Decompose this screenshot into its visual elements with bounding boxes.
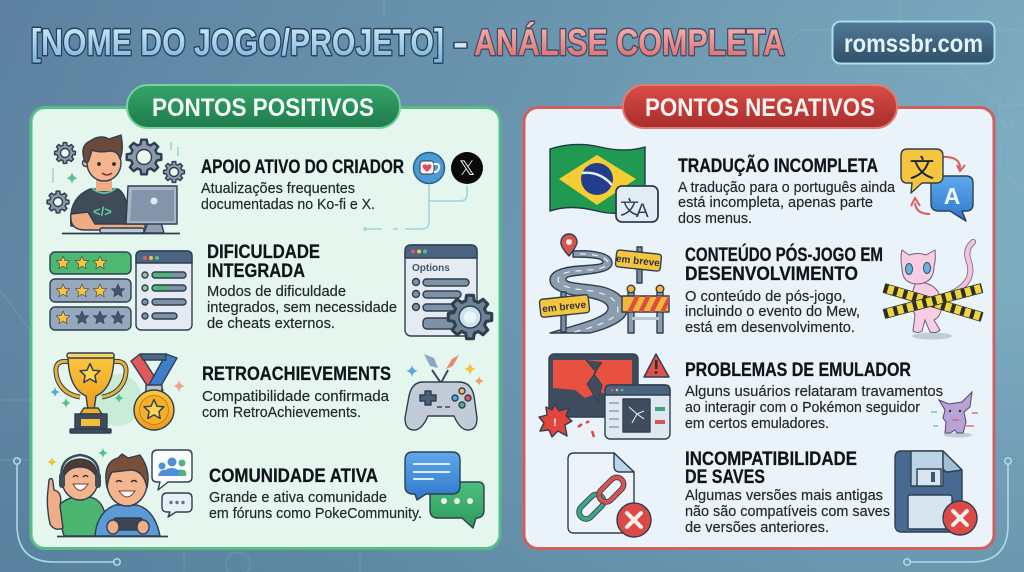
text: retroachievements: Compatibilidade confirmada — [202, 388, 390, 405]
icon: glitched purple creature — [931, 392, 978, 438]
text: retroachievements — [202, 364, 391, 421]
icon: road with em breve signs and barrier — [539, 234, 669, 333]
icon: road with em breve signs and barrier: em breve — [542, 300, 587, 315]
icon: game controller — [405, 354, 484, 430]
text: tradução incompleta: está incompleta, apenas parte — [678, 194, 873, 211]
text: problemas de emulador: em certos emuladores. — [685, 415, 829, 432]
icon: broken monitor and warning: ! — [553, 417, 557, 429]
text: comunidade ativa — [209, 466, 422, 522]
text: comunidade ativa: Grande e ativa comunidade — [209, 489, 387, 506]
icon: brazilian flag with translate badge: 文 — [620, 197, 639, 219]
text: apoio ativo do criador: Atualizações frequentes — [201, 180, 355, 197]
heading pill: pontos negativos — [623, 85, 897, 128]
icon: options window with gear — [405, 245, 492, 339]
text: conteúdo pós-jogo: O conteúdo de pós-jogo, — [685, 288, 846, 305]
text: dificuldade integrada: integrados, sem necessidade — [207, 299, 397, 316]
text: incompatibilidade de saves — [685, 449, 890, 536]
text: incompatibilidade de saves: não são compatíveis com saves — [685, 503, 890, 520]
text: dificuldade integrada: DIFICULDADE — [207, 242, 320, 263]
text: dificuldade integrada: Modos de dificuldade — [207, 283, 346, 300]
text: dificuldade integrada: INTEGRADA — [207, 261, 305, 282]
text: conteúdo pós-jogo: está em desenvolvimento. — [685, 319, 855, 336]
icon: road with em breve signs and barrier: em breve — [615, 254, 661, 269]
text: apoio ativo do criador: APOIO ATIVO DO CRIADOR — [201, 157, 404, 178]
icon: chat bubbles — [405, 452, 484, 528]
site badge: romssbr.com — [844, 30, 983, 58]
icons: ko-fi and x logos: 𝕏 — [459, 158, 475, 180]
icon: translation bubbles: A — [944, 183, 960, 209]
icon: difficulty star bars — [50, 251, 192, 330]
text: apoio ativo do criador — [201, 157, 404, 213]
icon: floppy disk with error — [895, 451, 977, 535]
text: comunidade ativa: em fóruns como PokeCommunity. — [209, 505, 422, 522]
text: conteúdo pós-jogo: DESENVOLVIMENTO — [685, 264, 858, 285]
text: problemas de emulador: ao interagir com o Pokémon seguidor — [685, 399, 920, 416]
text: incompatibilidade de saves: Algumas versões mais antigas — [685, 487, 883, 504]
text: incompatibilidade de saves: de versões anteriores. — [685, 519, 829, 536]
icon: broken link document — [568, 453, 651, 537]
text: dificuldade integrada — [207, 242, 397, 332]
icon: brazilian flag with translate badge: A — [636, 201, 649, 222]
text: retroachievements: RETROACHIEVEMENTS — [202, 364, 391, 385]
title: - — [453, 22, 468, 63]
text: tradução incompleta: dos menus. — [678, 210, 752, 227]
bottom left circuit trace — [14, 458, 120, 565]
icon: options window with gear: Options — [412, 263, 450, 274]
text: problemas de emulador — [685, 360, 943, 432]
text: retroachievements: com RetroAchievements. — [202, 404, 361, 421]
text: tradução incompleta: A tradução para o português ainda — [678, 179, 896, 196]
text: incompatibilidade de saves: DE SAVES — [685, 467, 765, 488]
text: problemas de emulador: PROBLEMAS DE EMULADOR — [685, 360, 911, 381]
panel: pontos positivos — [31, 85, 500, 548]
text: conteúdo pós-jogo — [685, 244, 883, 336]
icons: ko-fi and x logos — [363, 152, 483, 231]
title: [NOME DO JOGO/PROJETO] — [31, 22, 444, 63]
text: comunidade ativa: COMUNIDADE ATIVA — [209, 466, 378, 487]
text: tradução incompleta — [678, 155, 896, 227]
icon: translation bubbles: 文 — [909, 155, 935, 183]
icon: broken monitor and warning — [539, 354, 670, 439]
icon: translation bubbles — [901, 149, 973, 221]
text: incompatibilidade de saves: INCOMPATIBILIDADE — [685, 449, 857, 470]
title — [31, 22, 785, 63]
site badge — [832, 22, 994, 64]
bottom right circuit trace — [904, 458, 1011, 565]
icon: brazilian flag with translate badge — [550, 144, 658, 222]
heading pill: pontos positivos — [127, 85, 400, 128]
icon: developer at computer: </> — [93, 204, 112, 219]
text: conteúdo pós-jogo: CONTEÚDO PÓS-JOGO EM — [685, 244, 883, 266]
title: ANÁLISE COMPLETA — [474, 22, 785, 63]
text: tradução incompleta: TRADUÇÃO INCOMPLETA — [678, 155, 878, 177]
heading pill: pontos negativos: PONTOS NEGATIVOS — [645, 94, 875, 122]
text: apoio ativo do criador: documentadas no Ko-fi e X. — [201, 196, 375, 213]
icon: developer at computer — [47, 135, 184, 234]
text: conteúdo pós-jogo: incluindo o evento do Mew, — [685, 303, 860, 320]
text: problemas de emulador: Alguns usuários relataram travamentos — [685, 383, 943, 400]
icon: pink creature behind caution tape — [884, 242, 982, 340]
icon: trophy and medal — [50, 353, 185, 433]
text: dificuldade integrada: de cheats externos. — [207, 315, 335, 332]
heading pill: pontos positivos: PONTOS POSITIVOS — [152, 94, 374, 122]
icon: two happy gamers — [47, 448, 192, 536]
panel: pontos negativos — [524, 85, 994, 548]
